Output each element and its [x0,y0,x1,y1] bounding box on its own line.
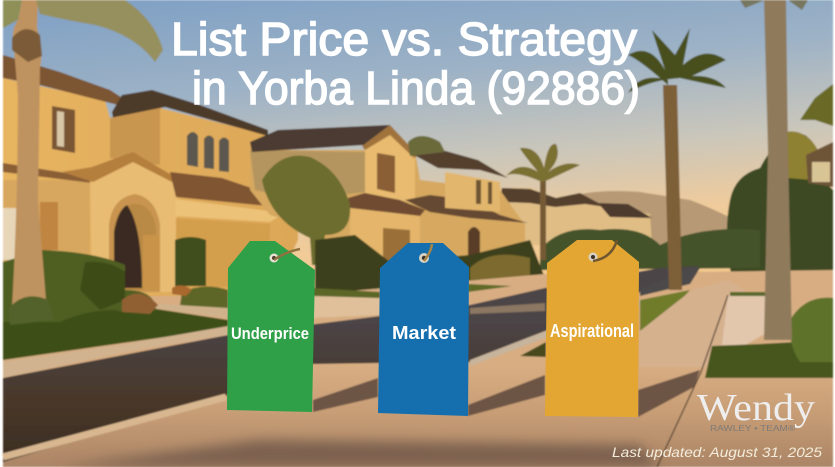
road left [3,266,700,462]
left lawn [3,308,228,360]
window left [52,106,75,153]
house two entry walls [350,208,420,262]
right background house [806,142,833,187]
tag: market [378,243,469,416]
lower left wing [3,180,90,300]
right tall palm [740,0,833,340]
logo: Wendy Rawley Team: Wendy [697,387,815,429]
left driveway [155,304,228,318]
column shrub [175,237,206,286]
garage door [176,218,270,287]
house one second roof [112,90,268,136]
house two main roof [250,125,390,152]
left palm [3,0,163,325]
house one upper walls [3,55,298,300]
house two gable wall [365,130,415,205]
house one left roof [3,55,130,106]
dark shrubs by house two [315,235,545,295]
tag shadows [313,370,700,417]
far houses [500,188,652,245]
left curb [3,326,228,378]
street-side flowers [470,255,530,280]
smaller palm [506,144,580,260]
right bush [790,298,833,362]
far right curb and lawn strip [470,300,645,366]
right background tree [727,134,833,292]
tag: market: Market [392,323,456,343]
distant hills [560,191,760,260]
far road strip [640,268,700,296]
centre driveway [313,296,380,318]
sky [3,0,833,300]
arched entry [109,194,160,292]
arched windows [143,125,155,160]
gable entry [90,155,178,292]
sidewalk crack [657,295,728,467]
right low roof [170,172,298,209]
bottom curb line [3,397,226,457]
title line one: List Price vs. Strategy [171,13,637,65]
left low eave [3,163,92,183]
tag: underprice: Underprice [231,324,309,343]
light sidewalk to the right [640,280,760,367]
upper shutter window [377,153,395,193]
wall band above garage [175,199,285,222]
centre lawn [313,288,380,298]
house two lower roof [348,193,425,216]
title [171,13,640,114]
house two back roof [414,150,508,178]
tree between houses [262,156,350,265]
left shrubs [3,250,156,322]
mid shrubs on street [540,229,760,270]
ground base [3,270,833,467]
tag: underprice [227,241,315,412]
right lawn [705,340,833,378]
logo: Wendy Rawley Team: RAWLEY • TEAM® [710,424,795,433]
house two [250,125,528,268]
centre tall palm [628,28,726,290]
last updated note: Last updated: August 31, 2025 [612,444,822,460]
porch column [143,235,159,290]
tag: aspirational: Aspirational [550,321,634,341]
title line two: in Yorba Linda (92886) [192,62,640,114]
foreground bottom shade [60,440,660,467]
road highlight [470,303,545,314]
shadowed wall under eave [110,108,160,165]
tag: aspirational [545,240,639,417]
